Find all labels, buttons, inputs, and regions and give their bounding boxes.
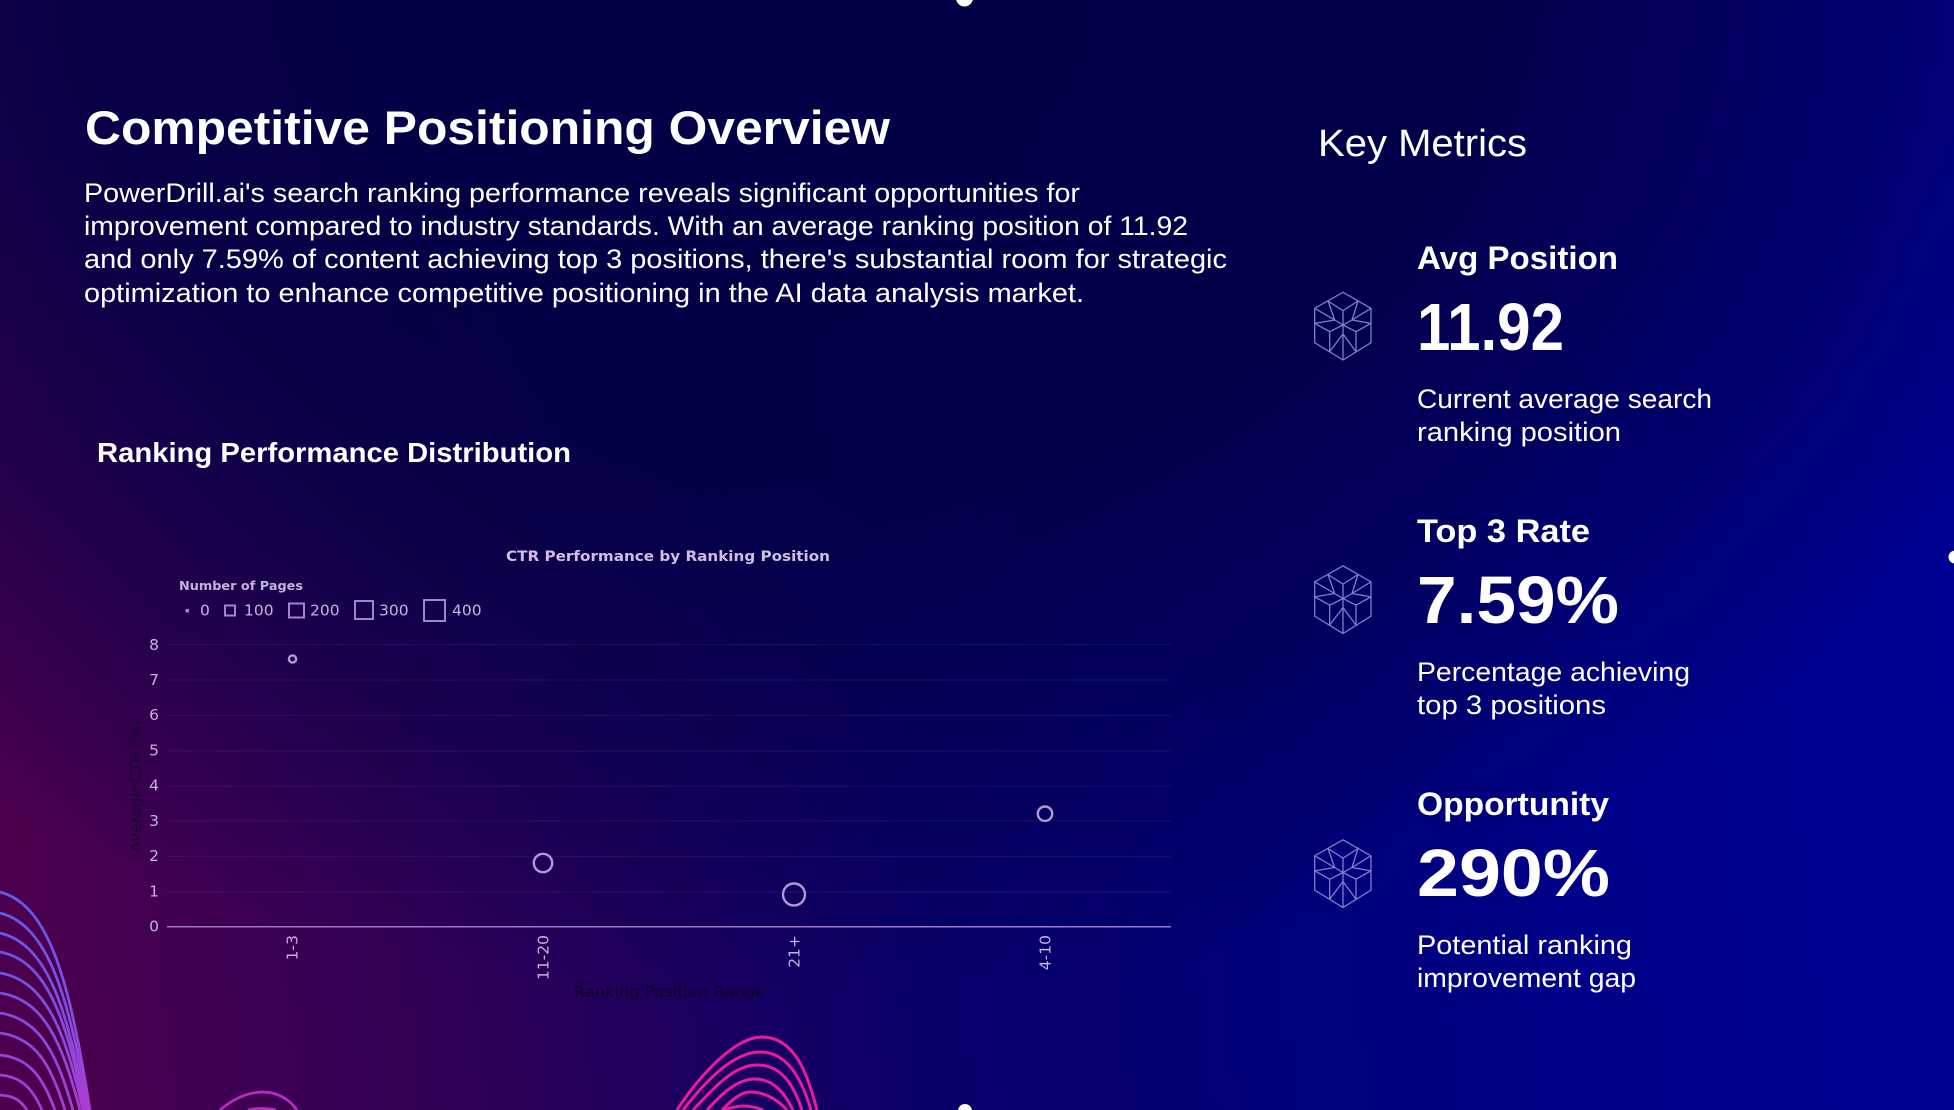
description: ranking position (1417, 417, 1621, 447)
intro paragraph: improvement compared to industry standards. With an average ranking position of 11.92 (84, 211, 1188, 241)
decoration: left wave lines (0, 892, 90, 1110)
description: Percentage achieving (1417, 657, 1690, 687)
x axis ticks (284, 935, 1054, 980)
size legend: 100 (244, 602, 274, 620)
data points (289, 655, 1052, 906)
scatter chart: CTR by ranking position (127, 549, 1171, 1001)
y axis ticks: 1 (149, 882, 159, 900)
y axis ticks: 4 (149, 776, 159, 794)
axis titles: Ranking Position Range (574, 983, 765, 1001)
y axis ticks: 8 (149, 636, 159, 654)
intro paragraph: optimization to enhance competitive positioning in the AI data analysis market. (84, 278, 1084, 308)
description (1417, 384, 1712, 447)
intro paragraph: PowerDrill.ai's search ranking performance reveals significant opportunities for (84, 178, 1080, 208)
key metrics heading: Key Metrics (1318, 123, 1527, 165)
grid lines (167, 644, 1171, 892)
description (1417, 930, 1636, 993)
metric: opportunity (1315, 786, 1636, 993)
icon: hexagon cube (1315, 292, 1371, 360)
x axis ticks: 4-10 (1036, 935, 1054, 970)
metric: top 3 rate (1315, 513, 1690, 720)
description: improvement gap (1417, 963, 1636, 993)
x axis ticks: 1-3 (284, 935, 302, 960)
axis titles (127, 720, 765, 1001)
decoration: white edge dots (956, 0, 1954, 1110)
y axis ticks: 2 (149, 847, 159, 865)
value: 7.59% (1417, 563, 1619, 638)
axis titles: Average CTR (%) (127, 720, 145, 852)
description: Potential ranking (1417, 930, 1632, 960)
metric: avg position (1315, 240, 1712, 447)
description: top 3 positions (1417, 690, 1606, 720)
title: Competitive Positioning Overview (85, 101, 890, 154)
chart section heading: Ranking Performance Distribution (97, 437, 571, 468)
chart title: CTR Performance by Ranking Position (506, 549, 830, 565)
decoration: small purple wave (220, 1092, 297, 1110)
y axis ticks: 5 (149, 742, 159, 760)
description: Current average search (1417, 384, 1712, 414)
decoration: pink wave (677, 1037, 817, 1110)
y axis ticks (149, 636, 159, 936)
label: Avg Position (1417, 240, 1618, 276)
size legend: 200 (310, 602, 340, 620)
value: 290% (1417, 836, 1610, 911)
intro paragraph (84, 178, 1227, 308)
y axis ticks: 0 (149, 918, 159, 936)
value: 11.92 (1417, 290, 1564, 365)
y axis ticks: 3 (149, 812, 159, 830)
size legend: 0 (200, 602, 210, 620)
icon: hexagon cube (1315, 566, 1371, 633)
icon: hexagon cube (1315, 840, 1371, 907)
x axis line (167, 926, 1171, 928)
intro paragraph: and only 7.59% of content achieving top 3 positions, there's substantial room for strategic (84, 244, 1227, 274)
size legend: 300 (379, 602, 409, 620)
x axis ticks: 11-20 (534, 935, 552, 980)
size legend: Number of Pages (179, 578, 303, 593)
x axis ticks: 21+ (786, 935, 804, 968)
y axis ticks: 6 (149, 706, 159, 724)
size legend (179, 578, 482, 621)
label: Opportunity (1417, 786, 1609, 822)
y axis ticks: 7 (149, 671, 159, 689)
size legend: 400 (452, 602, 482, 620)
description (1417, 657, 1690, 720)
label: Top 3 Rate (1417, 513, 1590, 549)
